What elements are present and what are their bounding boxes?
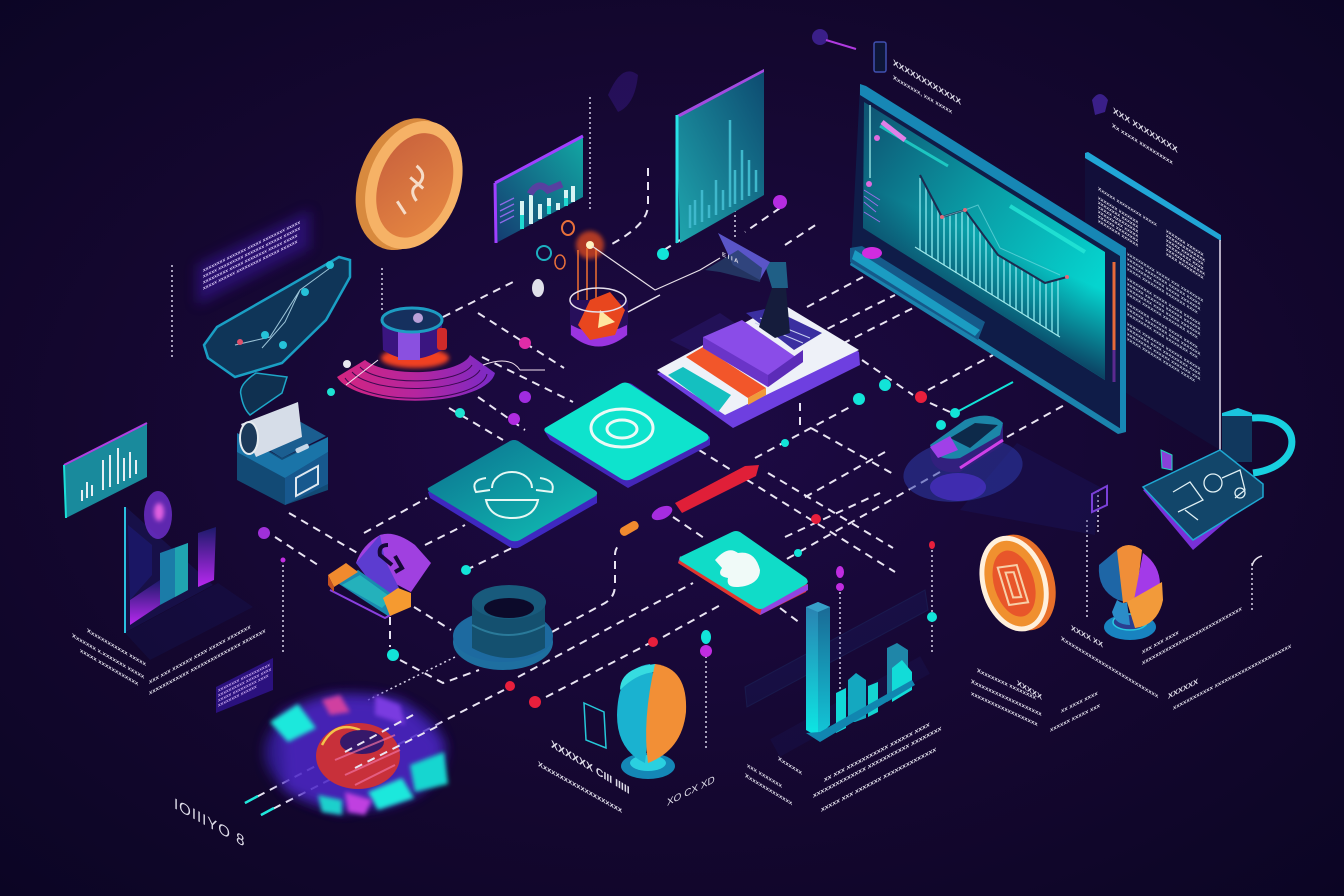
document text block 2 bbox=[1166, 228, 1206, 283]
network: nodes bbox=[258, 195, 1013, 708]
document text block 3: xxxxxx xxxxxxxx xxxxxx xxxxx bbox=[1127, 256, 1200, 307]
orange slab bbox=[686, 347, 766, 398]
text box: upper left: xxxxxxxxx xxxxx xxxxxxxx xxxxx xxxxx bbox=[203, 233, 297, 286]
document text block 3: xxxxxx xxxxxxxx xxxx xxxxxxx bbox=[1127, 306, 1200, 357]
text: bar chart captions: xxxxx xxx xxxxxxx xxxxxxxxxxxxxx bbox=[821, 744, 936, 814]
document text block 3: xxxxx xxxxxxxx xxxxxxx xxxx bbox=[1127, 266, 1198, 316]
ring icon bbox=[591, 409, 653, 447]
document text block 3: xxxxxxxxxx xxxxx xxx xxxxxxxx bbox=[1127, 251, 1203, 304]
text box: purple: xxxxxxxx xxxxxxxxxxx bbox=[218, 662, 270, 694]
document text block 3: xxxxxxxx xxxx xxxxxxxxx xxxx bbox=[1127, 326, 1200, 377]
text: bar chart captions: Xxxxxxxxxxxxxx bbox=[745, 772, 793, 807]
robotic stylus bbox=[759, 288, 790, 338]
device: ring on brim bbox=[453, 585, 553, 670]
text: coin captions: xx xxxx xxxx bbox=[1061, 690, 1098, 715]
device: keyboard platform with arm bbox=[657, 233, 860, 428]
document text: xxxxxx xxxxxxxx bbox=[1098, 214, 1138, 244]
red connector bar bbox=[675, 465, 759, 513]
document text block 3: xxxxxxxxx xxxx xxxxx xxxxxxx bbox=[1127, 286, 1200, 337]
text: bar chart captions: Xxxxxxx bbox=[778, 755, 802, 777]
document text block 2: xxxx xxxxxxxxx bbox=[1166, 251, 1204, 282]
text: coin captions: xxxxxxxxxxxxxxxxxxxx bbox=[971, 690, 1038, 728]
monitor line chart bbox=[915, 175, 1069, 337]
top label 1: Xxxxxxxx, xxx xxxxx bbox=[893, 74, 952, 116]
icon: robot arm bbox=[204, 257, 350, 505]
glowing disc bbox=[245, 694, 448, 815]
document text block 3: xxxxxxxxx xxxx xxxxxxxx xxx bbox=[1127, 311, 1198, 361]
top label 1: XXXXXXXXXXXX bbox=[893, 58, 962, 107]
text: coin captions: Xxxxxxxxxxxxxxxxxxxxx bbox=[971, 678, 1042, 718]
document text block 3: xxxxxxxxx xxxxx xxxxx xxxxxx bbox=[1127, 276, 1200, 327]
tile: teal ring bbox=[544, 382, 710, 488]
device: beaker with spark bbox=[532, 221, 720, 346]
faces icon bbox=[474, 472, 553, 518]
document text bbox=[1098, 186, 1157, 260]
document text block 3: xxxxx xxxxxxxx xxxxxx xxxxxx bbox=[1127, 321, 1200, 372]
icon: shadow chip bbox=[1092, 486, 1107, 512]
document text block 3: xxxxx xxxxxxx xxxxxx xxxxx bbox=[1127, 336, 1195, 384]
text: lower left A: Xxxxxxxxxxxx xxxxx bbox=[87, 627, 146, 668]
text: coin captions: xxxxxx xxxxx xxx bbox=[1050, 702, 1100, 734]
label: bottom phone text bbox=[538, 739, 630, 815]
document text: Xxxxxx xxxxxxxxx xxxxx bbox=[1098, 186, 1157, 228]
panel: main monitor bbox=[850, 84, 1126, 434]
teal slab bbox=[668, 367, 731, 412]
icon: orange coin 1 bbox=[338, 104, 480, 267]
label: bottom phone text: XXXXXX CIII IIIII bbox=[551, 739, 630, 797]
tile: blue faces bbox=[428, 440, 597, 548]
document text block 3: xxxxxxxxx xxxxxx xxxxxxx xxx bbox=[1127, 331, 1200, 382]
text: lower left A: xxxxx xxxxxxxxxxxx bbox=[80, 647, 139, 688]
top label 2 bbox=[1092, 94, 1178, 167]
text box: purple bbox=[216, 658, 273, 713]
document text: xxxxxxx xxxxxxx bbox=[1098, 195, 1138, 226]
label: bottom small: XO CX XD bbox=[667, 773, 715, 809]
text: bar chart captions: xxx xxxxxxx bbox=[747, 762, 782, 790]
tile: phone card bbox=[678, 531, 808, 615]
document text block 3: xxxxx xxxxxxx xxxxxxxx xxxx bbox=[1127, 291, 1198, 341]
text box: purple: xxxxx xxxxxxxxx xxxx bbox=[218, 673, 269, 704]
text: bar chart captions: xxxxxxxxxxxxxx xxxxxxxxxxx xxxxxxxx bbox=[813, 723, 941, 800]
text: bar chart captions: xx xxx xxxxxxxxxxx xxxxxx xxxx bbox=[824, 719, 930, 784]
device: mouse on disc bbox=[899, 416, 1100, 535]
document text block 3 bbox=[1127, 251, 1203, 389]
document text block 2: xxxxxxxxxxxxxx bbox=[1166, 233, 1206, 264]
text: pie captions: XXXX XX bbox=[1071, 623, 1104, 650]
document text block 2: xxxxxxx xxxxxx bbox=[1166, 228, 1204, 259]
text box: upper left: xxxxxxxx xxxxxxx xxxxx xxxxxxxx xxxxx bbox=[203, 220, 300, 274]
side text bbox=[864, 190, 880, 222]
text: lower left B: xxx xxx xxxxxx xxxx xxxxx xxxxxxx bbox=[149, 623, 251, 686]
label: disc caption: IOIIIYO 8 bbox=[174, 795, 245, 851]
device: keyboard platform with arm: E I I A bbox=[722, 251, 739, 265]
pad icons bbox=[1173, 470, 1245, 520]
text box: upper left bbox=[197, 210, 310, 305]
document text: xxxxxxxxx xxxxx bbox=[1098, 209, 1138, 240]
icon: pie on stand bbox=[1099, 545, 1163, 640]
device: scanner pad with lock ring bbox=[1143, 408, 1292, 550]
text: coin captions bbox=[971, 667, 1100, 734]
document text block 2: xxxxxxxxx xxxx bbox=[1166, 242, 1204, 273]
top label 2: Xx xxxxx xxxxxxxxxx bbox=[1112, 122, 1173, 167]
text: bar chart captions bbox=[745, 719, 941, 814]
orange node bbox=[618, 520, 640, 537]
panel: tall bar chart bbox=[677, 69, 764, 243]
network: dashed connectors bbox=[172, 97, 1252, 815]
panel: small left chart bbox=[64, 423, 147, 518]
purple node bbox=[649, 503, 675, 523]
chart: purple bars with glow bbox=[125, 491, 253, 660]
text: pie captions: xxx xxx xxxx bbox=[1142, 629, 1179, 656]
top label 2: XXX XXXXXXXX bbox=[1113, 106, 1178, 155]
text: pie captions: xxxxxxxxxxxx xxxxxxxxxxxxxxxxxxxxxxx bbox=[1173, 642, 1292, 712]
icon: oval pie on stand bbox=[617, 664, 686, 779]
text box: purple: xxxxxxxx xxxxxx bbox=[218, 684, 257, 709]
coin 2 bbox=[968, 525, 1067, 641]
text box: purple: xxxxxxxxxx xxxxx xxxx bbox=[218, 667, 271, 699]
text box: upper left: xxxxx xxxxxx xxxxxxxxx xxxxxx xxxxxx bbox=[203, 239, 297, 292]
document text block 3: xxxxxx xxxxxxx xxxxxx xxxxxx bbox=[1127, 281, 1200, 332]
icon: top swirl bbox=[608, 71, 638, 112]
cloud icon bbox=[715, 550, 760, 587]
purple keyboard slab bbox=[703, 320, 803, 387]
text: coin captions: Xxxxxxxxx xxxxxxxx bbox=[977, 667, 1036, 702]
device: cylinder with fan bbox=[337, 308, 545, 401]
text: pie captions: xxxxxxxxxxxxxxxxxxxxxxxxxxxxxx bbox=[1142, 605, 1242, 667]
icon: small chip by pad bbox=[1161, 450, 1172, 470]
paper roll bbox=[241, 402, 302, 457]
text: pie captions: XXXXXX bbox=[1168, 677, 1199, 701]
document text block 2: xxxxx xxxxxxxx bbox=[1166, 238, 1204, 268]
panel: document behind monitor bbox=[1085, 152, 1221, 450]
document text: xxxxx xxxxxxxxx bbox=[1098, 205, 1138, 235]
icon: thin phone outline bbox=[584, 703, 606, 748]
document text block 3: xxxxxxxxx xxxx xxxxx xxxxxxx bbox=[1127, 261, 1200, 312]
monitor stand bbox=[850, 246, 985, 340]
text: coin captions: XXXXX bbox=[1017, 679, 1042, 702]
text: lower left B: xxxxxxxxxxxx xxxxxxxxxxxxxxx xxxxxxx bbox=[149, 627, 266, 697]
document text block 3: xxxxxxxx xxxxxx xxxxx xxxxx bbox=[1127, 301, 1198, 351]
panel: small dashboard bbox=[495, 136, 583, 243]
text: pie captions: Xxxxxxxxxxxxxxxxxxxxxxxxxxxxx bbox=[1061, 635, 1159, 700]
text: pie captions bbox=[1061, 556, 1292, 712]
label: bottom phone text: Xxxxxxxxxxxxxxxxxxxx bbox=[538, 759, 623, 815]
text box: upper left: xxxxx xxxxxxxxx xxxxxxx xxxxxx xxxxxx bbox=[203, 226, 300, 280]
document text: xxxxxxxx xxxxxx bbox=[1098, 218, 1138, 249]
chart: 3D bars with grid bbox=[745, 590, 928, 748]
device: shield card with orange clips bbox=[328, 534, 431, 618]
scanner base bbox=[237, 433, 328, 505]
document text: xxxxxxxx xxxxxx bbox=[1098, 200, 1138, 230]
top label 1 bbox=[812, 29, 962, 116]
text: lower left A: Xxxxxxx x.xxxxxxx xxxxx bbox=[72, 632, 145, 681]
document text block 2: xxxxxxxxxxxxxx bbox=[1166, 247, 1206, 278]
glow orb bbox=[144, 491, 172, 539]
